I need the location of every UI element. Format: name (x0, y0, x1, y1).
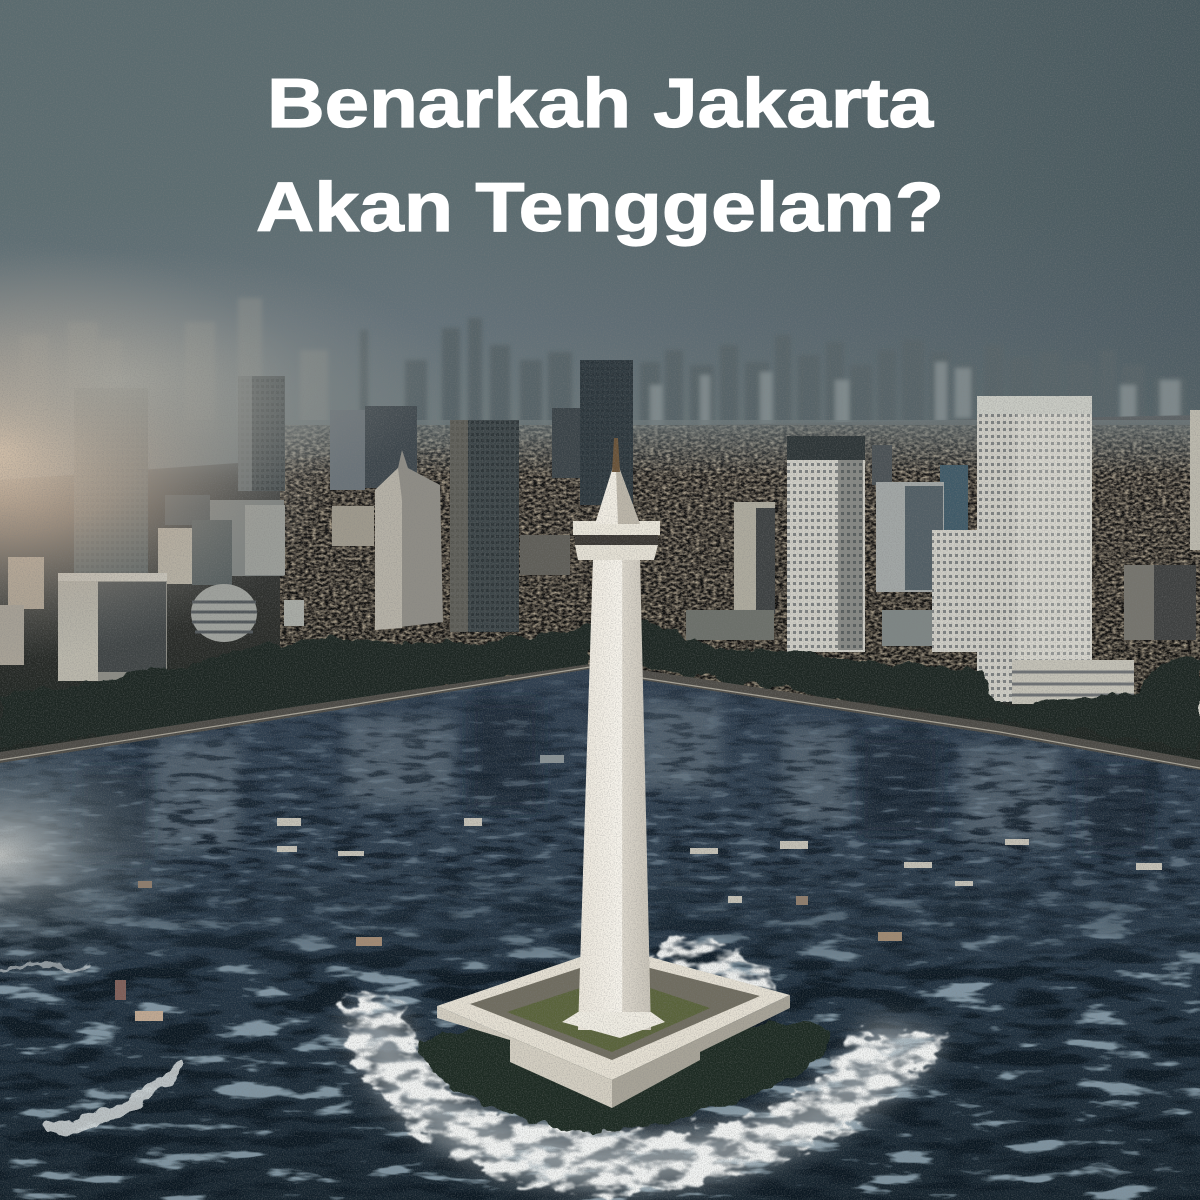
trees along shore (0, 620, 1200, 748)
building reflections (0, 680, 1200, 1200)
title: Akan Tenggelam? (256, 168, 944, 246)
obelisk shaft (578, 558, 651, 1030)
promenade roads (0, 664, 1200, 770)
small ripples (0, 680, 1200, 980)
dense low-rise houses (280, 425, 1200, 700)
white wave crests and foam (0, 936, 950, 1194)
skyline buildings right (686, 396, 1200, 718)
distant hazy skyline (20, 298, 1185, 455)
observation platform (573, 521, 660, 560)
title (256, 64, 944, 246)
boats (115, 755, 1162, 1021)
plaza base (437, 957, 790, 1108)
skyline buildings left (0, 360, 633, 681)
flame spire (595, 445, 640, 524)
water (0, 668, 1200, 1200)
island (419, 1024, 832, 1132)
sky background (0, 0, 1200, 500)
city ground (0, 415, 1200, 770)
title: Benarkah Jakarta (267, 64, 934, 142)
monas monument (419, 438, 832, 1132)
warm haze over left city (0, 130, 520, 770)
big foreground waves (0, 860, 1200, 1200)
